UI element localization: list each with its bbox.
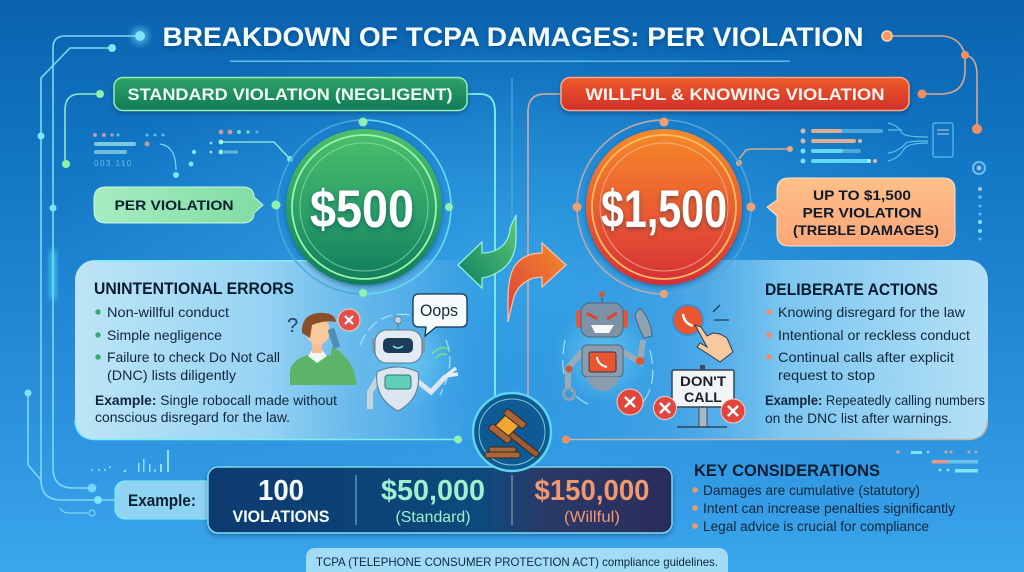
callout: treble damages — [767, 178, 955, 246]
bullet list: left: Non-willful conduct — [107, 304, 229, 320]
example label — [115, 481, 220, 519]
bullet list: right: Intentional or reckless conduct — [778, 327, 970, 343]
bullet list: left — [95, 304, 280, 383]
circuit lines: right — [882, 31, 985, 240]
illustration: red call button and hand — [673, 305, 733, 362]
gavel badge — [473, 393, 551, 471]
header: standard violation — [114, 78, 467, 110]
bullet list: right: request to stop — [778, 367, 875, 383]
badge: $1,500: $1,500 — [601, 180, 727, 239]
result: violations: VIOLATIONS — [232, 507, 330, 526]
callout: per violation — [94, 187, 263, 223]
footer note: TCPA (TELEPHONE CONSUMER PROTECTION ACT) compliance guidelines. — [316, 555, 718, 569]
circuit lines: left — [24, 27, 149, 516]
header: willful violation — [561, 78, 909, 110]
callout: treble damages: (TREBLE DAMAGES) — [793, 222, 939, 238]
illustration: don't call sign: DON'T — [680, 374, 727, 389]
result: violations — [232, 475, 330, 526]
panel: left details — [75, 260, 500, 440]
heading: deliberate actions: DELIBERATE ACTIONS — [765, 281, 938, 299]
result: standard: $50,000 — [381, 475, 485, 507]
result: willful — [534, 475, 650, 526]
example text: right — [765, 393, 985, 426]
key considerations: Intent can increase penalties significantly — [703, 500, 955, 516]
key considerations: Damages are cumulative (statutory) — [703, 482, 920, 498]
header: standard violation: STANDARD VIOLATION (NEGLIGENT) — [128, 85, 452, 104]
key considerations: Legal advice is crucial for compliance — [703, 518, 929, 534]
decorative data marks: right — [736, 123, 953, 166]
example text: right: on the DNC list after warnings. — [765, 411, 952, 426]
illustration: confused person: ? — [287, 315, 298, 337]
result: violations: 100 — [258, 475, 304, 507]
decorative data marks: left — [93, 130, 293, 178]
decorative marks: bottom right — [896, 450, 978, 472]
results bar — [208, 467, 672, 533]
footer note — [306, 548, 728, 572]
decorative bars — [91, 450, 169, 472]
title rule — [230, 60, 790, 62]
badge: $1,500 — [572, 118, 756, 298]
callout: treble damages: UP TO $1,500 — [813, 187, 911, 203]
illustration: friendly robot — [360, 294, 467, 411]
badge: $500: $500 — [310, 180, 414, 239]
illustration: angry robot — [554, 291, 653, 410]
bullet list: left: Simple negligence — [107, 327, 222, 343]
bullet list: right — [766, 304, 970, 383]
example text: left: conscious disregard for the law. — [95, 410, 290, 425]
bullet list: left: Failure to check Do Not Call — [107, 349, 280, 365]
result: standard — [381, 475, 485, 526]
illustration: don't call sign: CALL — [684, 390, 722, 405]
panel: right details — [530, 260, 988, 440]
example text: left: Example: Single robocall made without — [95, 393, 337, 408]
connector end dots — [454, 436, 570, 444]
heading: unintentional errors: UNINTENTIONAL ERRORS — [94, 280, 294, 298]
illustration: confused person — [287, 309, 360, 385]
decorative data marks: left: 003 110 — [94, 159, 133, 168]
result: willful: $150,000 — [534, 475, 650, 507]
key considerations: KEY CONSIDERATIONS — [694, 461, 880, 480]
result: standard: (Standard) — [396, 509, 470, 526]
key considerations — [692, 461, 955, 534]
bullet list: left: (DNC) lists diligently — [107, 367, 236, 383]
header: willful violation: WILLFUL & KNOWING VIOLATION — [586, 85, 884, 104]
center connector lines — [468, 78, 561, 400]
result: willful: (Willful) — [564, 509, 620, 526]
title: BREAKDOWN OF TCPA DAMAGES: PER VIOLATION — [162, 22, 864, 52]
callout: treble damages: PER VIOLATION — [802, 204, 922, 220]
example text: right: Example: Repeatedly calling numbers — [765, 393, 985, 408]
illustration: don't call sign — [617, 365, 745, 427]
arrow: green left — [458, 215, 516, 288]
badge: $500 — [272, 118, 453, 297]
bullet list: right: Continual calls after explicit — [778, 349, 954, 365]
speech bubble: oops: Oops — [420, 301, 458, 320]
bullet list: right: Knowing disregard for the law — [778, 304, 966, 320]
example label: Example: — [128, 492, 196, 510]
callout: per violation: PER VIOLATION — [114, 197, 234, 213]
arrow: red right — [508, 243, 566, 322]
example text: left — [95, 393, 337, 425]
